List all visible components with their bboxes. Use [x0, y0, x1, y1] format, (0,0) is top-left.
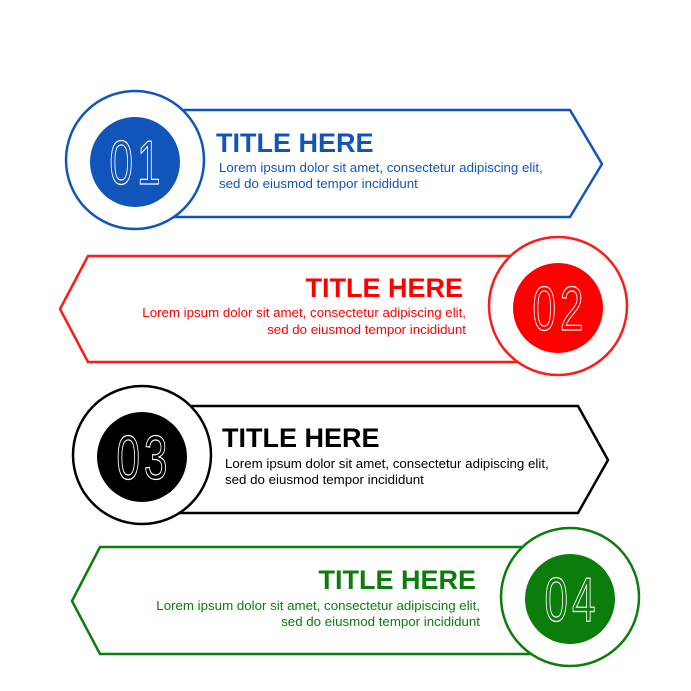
- icon: circle 02: [489, 237, 627, 375]
- body 3: sed do eiusmod tempor incididunt: [225, 472, 424, 487]
- panel: arrow box 3: [180, 406, 608, 513]
- body 1: sed do eiusmod tempor incididunt: [219, 176, 418, 191]
- panel: arrow box 1: [170, 110, 602, 217]
- icon: circle 01: 01: [110, 129, 165, 198]
- item 2: [60, 237, 627, 375]
- body 4: sed do eiusmod tempor incididunt: [281, 614, 480, 629]
- title 4: TITLE HERE: [318, 565, 476, 595]
- title 3: TITLE HERE: [222, 423, 380, 453]
- icon: circle 04: [501, 528, 639, 666]
- body 1: Lorem ipsum dolor sit amet, consectetur adipiscing elit,: [219, 160, 543, 175]
- icon: circle 02: 02: [533, 275, 588, 344]
- panel: arrow box 2: [60, 256, 520, 362]
- item 4: [72, 528, 639, 666]
- body 2: Lorem ipsum dolor sit amet, consectetur adipiscing elit,: [142, 305, 466, 320]
- body 4: Lorem ipsum dolor sit amet, consectetur adipiscing elit,: [156, 598, 480, 613]
- icon: circle 03: [73, 386, 211, 524]
- title 2: TITLE HERE: [305, 273, 463, 303]
- panel: arrow box 4: [72, 547, 530, 654]
- item 1: [66, 91, 602, 229]
- item 3: [73, 386, 608, 524]
- title 1: TITLE HERE: [216, 128, 374, 158]
- body 2: sed do eiusmod tempor incididunt: [267, 322, 466, 337]
- body 3: Lorem ipsum dolor sit amet, consectetur adipiscing elit,: [225, 456, 549, 471]
- icon: circle 04: 04: [545, 566, 600, 635]
- icon: circle 03: 03: [117, 424, 172, 493]
- icon: circle 01: [66, 91, 204, 229]
